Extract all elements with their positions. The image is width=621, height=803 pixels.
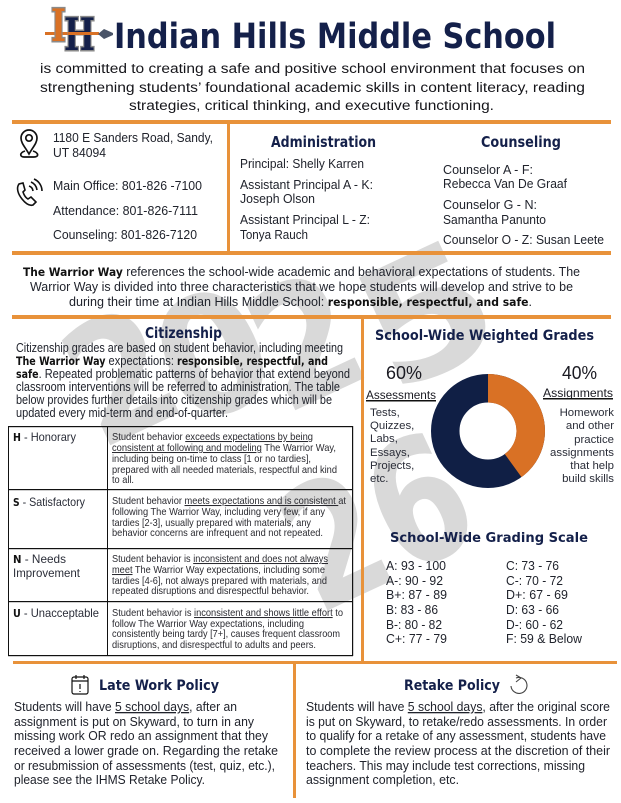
grading scale list: C+: 77 - 79 — [386, 631, 447, 646]
label: assessments 60%: etc. — [370, 473, 388, 485]
row: needs improvement: Student behavior is inconsistent and does not always — [112, 554, 328, 565]
text block: the warrior way: during their time at Indian Hills Middle School: responsible, respectful, and safe. — [69, 294, 532, 309]
panel: counseling: Counseling — [481, 133, 561, 151]
text block: late work policy: received a lower grade on. Regarding the retake — [14, 743, 278, 758]
text block: the warrior way: Warrior Way is divided into three characteristics that we hope students will develop and strive to be — [30, 279, 573, 294]
row: honorary: to all. — [112, 475, 134, 486]
label: assessments 60%: Essays, — [370, 447, 410, 459]
panel: counseling: Samantha Panunto — [443, 212, 546, 227]
label: assignments 40%: assignments — [550, 447, 614, 459]
label: assignments 40%: Assignments — [543, 386, 613, 400]
grading scale list: D+: 67 - 69 — [506, 587, 568, 602]
text block: retake policy: Students will have 5 school days, after the original score — [306, 699, 610, 714]
grading scale list: C-: 70 - 72 — [506, 573, 563, 588]
panel: counseling: Counselor O - Z: Susan Leete — [443, 232, 604, 247]
row: satisfactory: Student behavior meets expectations and is consistent at — [112, 496, 346, 507]
watermark: 2025-26 — [35, 201, 526, 652]
text block: retake policy: assignment completion, etc. — [306, 772, 459, 787]
heading: grading scale: School-Wide Grading Scale — [390, 530, 588, 546]
text block: late work policy: assignment is put on Skyward, to turn in any — [14, 714, 254, 729]
label: assessments 60%: 60% — [386, 363, 422, 383]
text block: citizenship intro: classroom interventions will be referred to administration. The table — [16, 379, 340, 394]
contact details: Main Office: 801-826 -7100 — [53, 178, 202, 193]
watermark: 2025-26: 5 — [327, 201, 526, 430]
panel: counseling: Counselor A - F: — [443, 162, 533, 177]
label: assessments 60%: Assessments — [366, 388, 436, 402]
icon: retake arrow — [511, 675, 527, 693]
icon: phone — [18, 179, 42, 205]
grading scale list: F: 59 & Below — [506, 631, 583, 646]
grading scale list: D-: 60 - 62 — [506, 617, 563, 632]
mission statement — [40, 61, 585, 113]
row: unacceptable: consistently being tardy [7+], causes frequent classroom — [112, 629, 340, 640]
mission statement: strengthening students’ foundational academic skills in content literacy, reading — [40, 80, 585, 95]
row: unacceptable: Student behavior is inconsistent and shows little effort to — [112, 608, 343, 619]
text block: retake policy: to complete the review process at the discretion of their — [306, 743, 611, 758]
watermark: 2025-26: 2 — [35, 269, 207, 485]
citizenship table — [8, 426, 353, 656]
text block: late work policy: missing work OR redo an assignment that they — [14, 728, 268, 743]
panel: administration: Assistant Principal L - Z: — [240, 212, 370, 227]
heading: retake policy: Retake Policy — [404, 678, 500, 694]
row: unacceptable: follow The Warrior Way expectations, including — [112, 619, 304, 630]
panel: administration: Principal: Shelly Karren — [240, 156, 364, 171]
grading scale list: B: 83 - 86 — [386, 602, 438, 617]
text block: citizenship intro: Citizenship grades are based on student behavior, including meeting — [16, 340, 343, 355]
row: satisfactory: behavior concerns are infrequent and not repeated. — [112, 528, 323, 539]
row: honorary: H - Honorary — [13, 430, 76, 444]
text block: retake policy: to qualify for a retake of any assessment, students have — [306, 728, 606, 743]
heading: citizenship: Citizenship — [145, 324, 222, 342]
heading: weighted grades: School-Wide Weighted Grades — [375, 328, 594, 344]
text block: citizenship intro: safe. Repeated problematic patterns of behavior that extend beyond — [16, 366, 350, 381]
label: assignments 40%: build skills — [562, 473, 614, 485]
row: needs improvement: repeated disruptions and disrespectful behavior. — [112, 586, 309, 597]
watermark: 2025-26: 2 — [220, 234, 392, 450]
school logo — [45, 0, 113, 61]
text block: the warrior way: The Warrior Way references the school-wide academic and behavioral expectations of students. The — [23, 264, 580, 279]
text block: late work policy — [14, 699, 278, 787]
label: assessments 60%: Tests, — [370, 407, 400, 419]
label: assignments 40%: 40% — [562, 363, 597, 383]
label: assessments 60% — [366, 363, 436, 485]
title: Indian Hills Middle School — [114, 17, 556, 57]
row: satisfactory — [13, 495, 346, 539]
contact details — [53, 130, 213, 242]
text block: citizenship intro: The Warrior Way expectations: responsible, respectful, and — [16, 353, 328, 368]
grading scale list — [386, 558, 583, 646]
contact details: 1180 E Sanders Road, Sandy, — [53, 130, 213, 145]
label: assessments 60%: Quizzes, — [370, 420, 414, 432]
row: satisfactory: S - Satisfactory — [13, 495, 85, 509]
mission statement: strategies, critical thinking, and executive functioning. — [129, 98, 494, 113]
panel: administration — [240, 133, 376, 242]
row: honorary: including being on-time to class [1 or no tardies], — [112, 454, 311, 465]
panel: administration: Administration — [271, 133, 376, 151]
heading: late work policy: Late Work Policy — [99, 678, 219, 694]
text block: late work policy: please see the IHMS Retake Policy. — [14, 772, 205, 787]
text block: the warrior way — [23, 264, 580, 309]
text block: citizenship intro — [16, 340, 350, 420]
row: satisfactory: following The Warrior Way, including very few, if any — [112, 507, 326, 518]
row: unacceptable: disruptions, and disrespectful to adults and peers. — [112, 640, 316, 651]
row: needs improvement — [13, 552, 328, 597]
row: needs improvement: meet The Warrior Way expectations, including some — [112, 565, 325, 576]
watermark: 2025-26: 26 — [252, 395, 503, 652]
row: honorary: prepared with all needed materials, respectful and kind — [112, 465, 337, 476]
row: needs improvement: Improvement — [13, 566, 81, 580]
text block: retake policy: is put on Skyward, to retake/redo assessments. In order — [306, 714, 608, 729]
row: needs improvement: N - Needs — [13, 552, 66, 566]
label: assignments 40%: Homework — [560, 407, 614, 419]
text block: late work policy: or resubmission of assessments (test, quiz, etc.), — [14, 758, 275, 773]
text block: citizenship intro: updated every mid-term and end-of-quarter. — [16, 405, 228, 420]
school logo: H — [64, 8, 95, 61]
label: assignments 40%: and other — [566, 420, 614, 432]
grading scale list: A: 93 - 100 — [386, 558, 446, 573]
grading scale list: B+: 87 - 89 — [386, 587, 447, 602]
school logo: I — [51, 0, 66, 52]
panel: counseling — [443, 133, 604, 247]
label: assignments 40%: practice — [574, 434, 614, 446]
row: unacceptable: U - Unacceptable — [13, 606, 99, 620]
grading scale list: D: 63 - 66 — [506, 602, 559, 617]
watermark: 2025-26: 0 — [125, 247, 302, 465]
text block: retake policy: teachers. This may include test corrections, missing — [306, 758, 585, 773]
text block: late work policy: Students will have 5 school days, after an — [14, 699, 237, 714]
label: assessments 60%: Projects, — [370, 460, 414, 472]
icon: location pin — [21, 130, 38, 157]
row: unacceptable — [13, 606, 343, 651]
icon: calendar — [72, 675, 88, 694]
grading scale list: C: 73 - 76 — [506, 558, 559, 573]
text block: retake policy — [306, 699, 611, 787]
text block: citizenship intro: below provides further details into citizenship grades which will be — [16, 392, 332, 407]
mission statement: is committed to creating a safe and positive school environment that focuses on — [40, 61, 585, 76]
panel: administration: Joseph Olson — [240, 191, 315, 206]
row: honorary — [13, 430, 337, 486]
donut chart — [445, 374, 545, 477]
row: honorary: Student behavior exceeds expectations by being — [112, 432, 313, 443]
contact details: Attendance: 801-826-7111 — [53, 203, 198, 218]
grading scale list: B-: 80 - 82 — [386, 617, 442, 632]
row: needs improvement: tardies [4-6], not always prepared with materials, and — [112, 576, 327, 587]
contact details: UT 84094 — [53, 145, 106, 160]
grading scale list: A-: 90 - 92 — [386, 573, 443, 588]
label: assignments 40%: that help — [570, 460, 614, 472]
panel: administration: Tonya Rauch — [240, 227, 308, 242]
label: assessments 60%: Labs, — [370, 433, 398, 445]
contact details: Counseling: 801-826-7120 — [53, 227, 197, 242]
row: honorary: consistent at following and modeling The Warrior Way, — [112, 443, 336, 454]
panel: counseling: Counselor G - N: — [443, 197, 537, 212]
panel: administration: Assistant Principal A - K: — [240, 177, 373, 192]
row: satisfactory: tardies [2-3], usually prepared with materials, any — [112, 518, 312, 529]
label: assignments 40% — [543, 363, 614, 485]
panel: counseling: Rebecca Van De Graaf — [443, 176, 567, 191]
